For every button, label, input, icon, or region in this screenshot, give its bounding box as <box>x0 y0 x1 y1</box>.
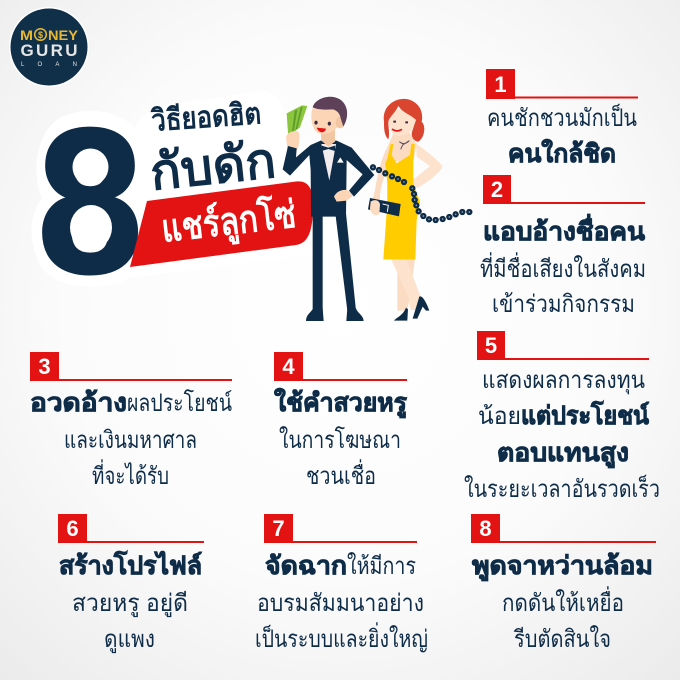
item 5: แต่ประโยชน์ <box>521 400 649 430</box>
number badge 6: 6 <box>66 516 79 541</box>
item 7: อบรมสัมมนาอย่าง <box>257 590 424 617</box>
number badge 4: 4 <box>282 354 295 379</box>
number badge 7: 7 <box>272 516 285 541</box>
item 7: จัดฉาก <box>265 552 347 580</box>
number badge 2 <box>483 175 645 204</box>
necklace <box>399 141 409 149</box>
item 2: เข้าร่วมกิจกรรม <box>492 291 635 318</box>
item 6: สวยหรู อยู่ดี <box>72 590 188 618</box>
number badge 3 <box>30 352 232 381</box>
white sticker backing <box>32 91 345 287</box>
item 4: ใช้คำสวยหรู <box>274 387 408 419</box>
legs <box>313 213 356 311</box>
logo: Money Guru Loan: $ <box>38 30 43 40</box>
item 5: แสดงผลการลงทุน <box>482 367 645 395</box>
item 7: เป็นระบบและยิ่งใหญ่ <box>255 622 428 653</box>
eyes and mouth <box>314 121 331 126</box>
hair <box>313 97 347 127</box>
title line 3: แชร์ลูกโซ่ <box>159 191 298 253</box>
item 7 <box>255 514 428 653</box>
red banner <box>130 181 313 267</box>
item 3: ผลประโยชน์ <box>127 389 232 417</box>
number badge 1 <box>486 69 638 99</box>
raised hand <box>286 131 299 151</box>
item 7: ให้มีการ <box>347 552 416 580</box>
item 3: ที่จะได้รับ <box>92 459 169 490</box>
left arm <box>370 144 392 215</box>
item 1: คนชักชวนมักเป็น <box>487 103 637 132</box>
face <box>311 108 342 134</box>
number badge 2: 2 <box>491 177 503 202</box>
item 4 <box>274 352 408 490</box>
hair <box>384 99 424 142</box>
item 5 <box>464 331 660 503</box>
front leg <box>391 258 421 310</box>
title sticker <box>32 86 345 316</box>
number badge 7 <box>264 514 417 543</box>
item 2: แอบอ้างชื่อคน <box>483 214 645 246</box>
pocket square <box>337 157 344 163</box>
item 5: ตอบแทนสูง <box>497 439 629 469</box>
logo: Money Guru Loan: LOAN <box>21 62 77 68</box>
item 6: ดูแพง <box>104 626 155 654</box>
waist hand <box>334 190 353 202</box>
item 8: กดดันให้เหยื่อ <box>502 586 624 617</box>
number badge 3: 3 <box>38 354 51 379</box>
item 8: พูดจาหว่านล้อม <box>472 552 653 582</box>
item 6 <box>58 514 204 654</box>
number badge 5 <box>477 331 649 360</box>
number badge 5: 5 <box>485 333 497 358</box>
numeral 8: 8 <box>38 86 142 316</box>
item 4: ในการโฆษณา <box>279 426 401 454</box>
logo: Money Guru Loan: M <box>20 27 33 43</box>
yellow dress <box>383 144 420 259</box>
item 8 <box>471 514 656 653</box>
neck and chest <box>388 130 417 162</box>
item 8: รีบตัดสินใจ <box>513 625 611 653</box>
number badge 8: 8 <box>479 516 492 541</box>
face <box>388 107 416 136</box>
item 1: คนใกล้ชิด <box>508 138 616 168</box>
eyes and mouth <box>393 121 408 123</box>
item 6: สร้างโปรไฟล์ <box>59 550 202 580</box>
title line 2: กับดัก <box>147 132 278 201</box>
ear <box>336 117 344 128</box>
item 4: ชวนเชื่อ <box>306 459 376 490</box>
logo: Money Guru Loan: GURU <box>20 41 78 60</box>
shoes <box>306 308 364 321</box>
item 3: และเงินมหาศาล <box>64 427 197 454</box>
money <box>287 105 307 133</box>
item 3 <box>30 352 232 490</box>
clutch bag <box>368 198 401 216</box>
item 2: ที่มีชื่อเสียงในสังคม <box>480 252 646 283</box>
hand on clutch <box>370 200 380 215</box>
bow tie <box>322 146 335 151</box>
number badge 8 <box>471 514 656 543</box>
jacket <box>283 141 374 217</box>
item 3: อวดอ้าง <box>30 389 127 417</box>
neck <box>321 127 335 147</box>
item 1 <box>486 69 638 168</box>
clasp <box>383 204 388 212</box>
logo: Money Guru Loan: NEY <box>48 27 79 43</box>
back leg <box>397 258 415 311</box>
illustration: businessman holding money <box>283 97 374 321</box>
illustration: chain <box>371 165 471 222</box>
item 2 <box>480 175 646 318</box>
number badge 6 <box>58 514 204 543</box>
logo: Money Guru Loan <box>9 7 89 87</box>
title line 1: วิธียอดฮิต <box>149 97 262 138</box>
shirt <box>321 144 336 181</box>
illustration: woman in yellow dress <box>368 99 442 321</box>
shoes <box>394 296 429 321</box>
item 5: น้อย <box>478 403 521 430</box>
right arm <box>405 143 442 188</box>
number badge 1: 1 <box>494 72 507 97</box>
